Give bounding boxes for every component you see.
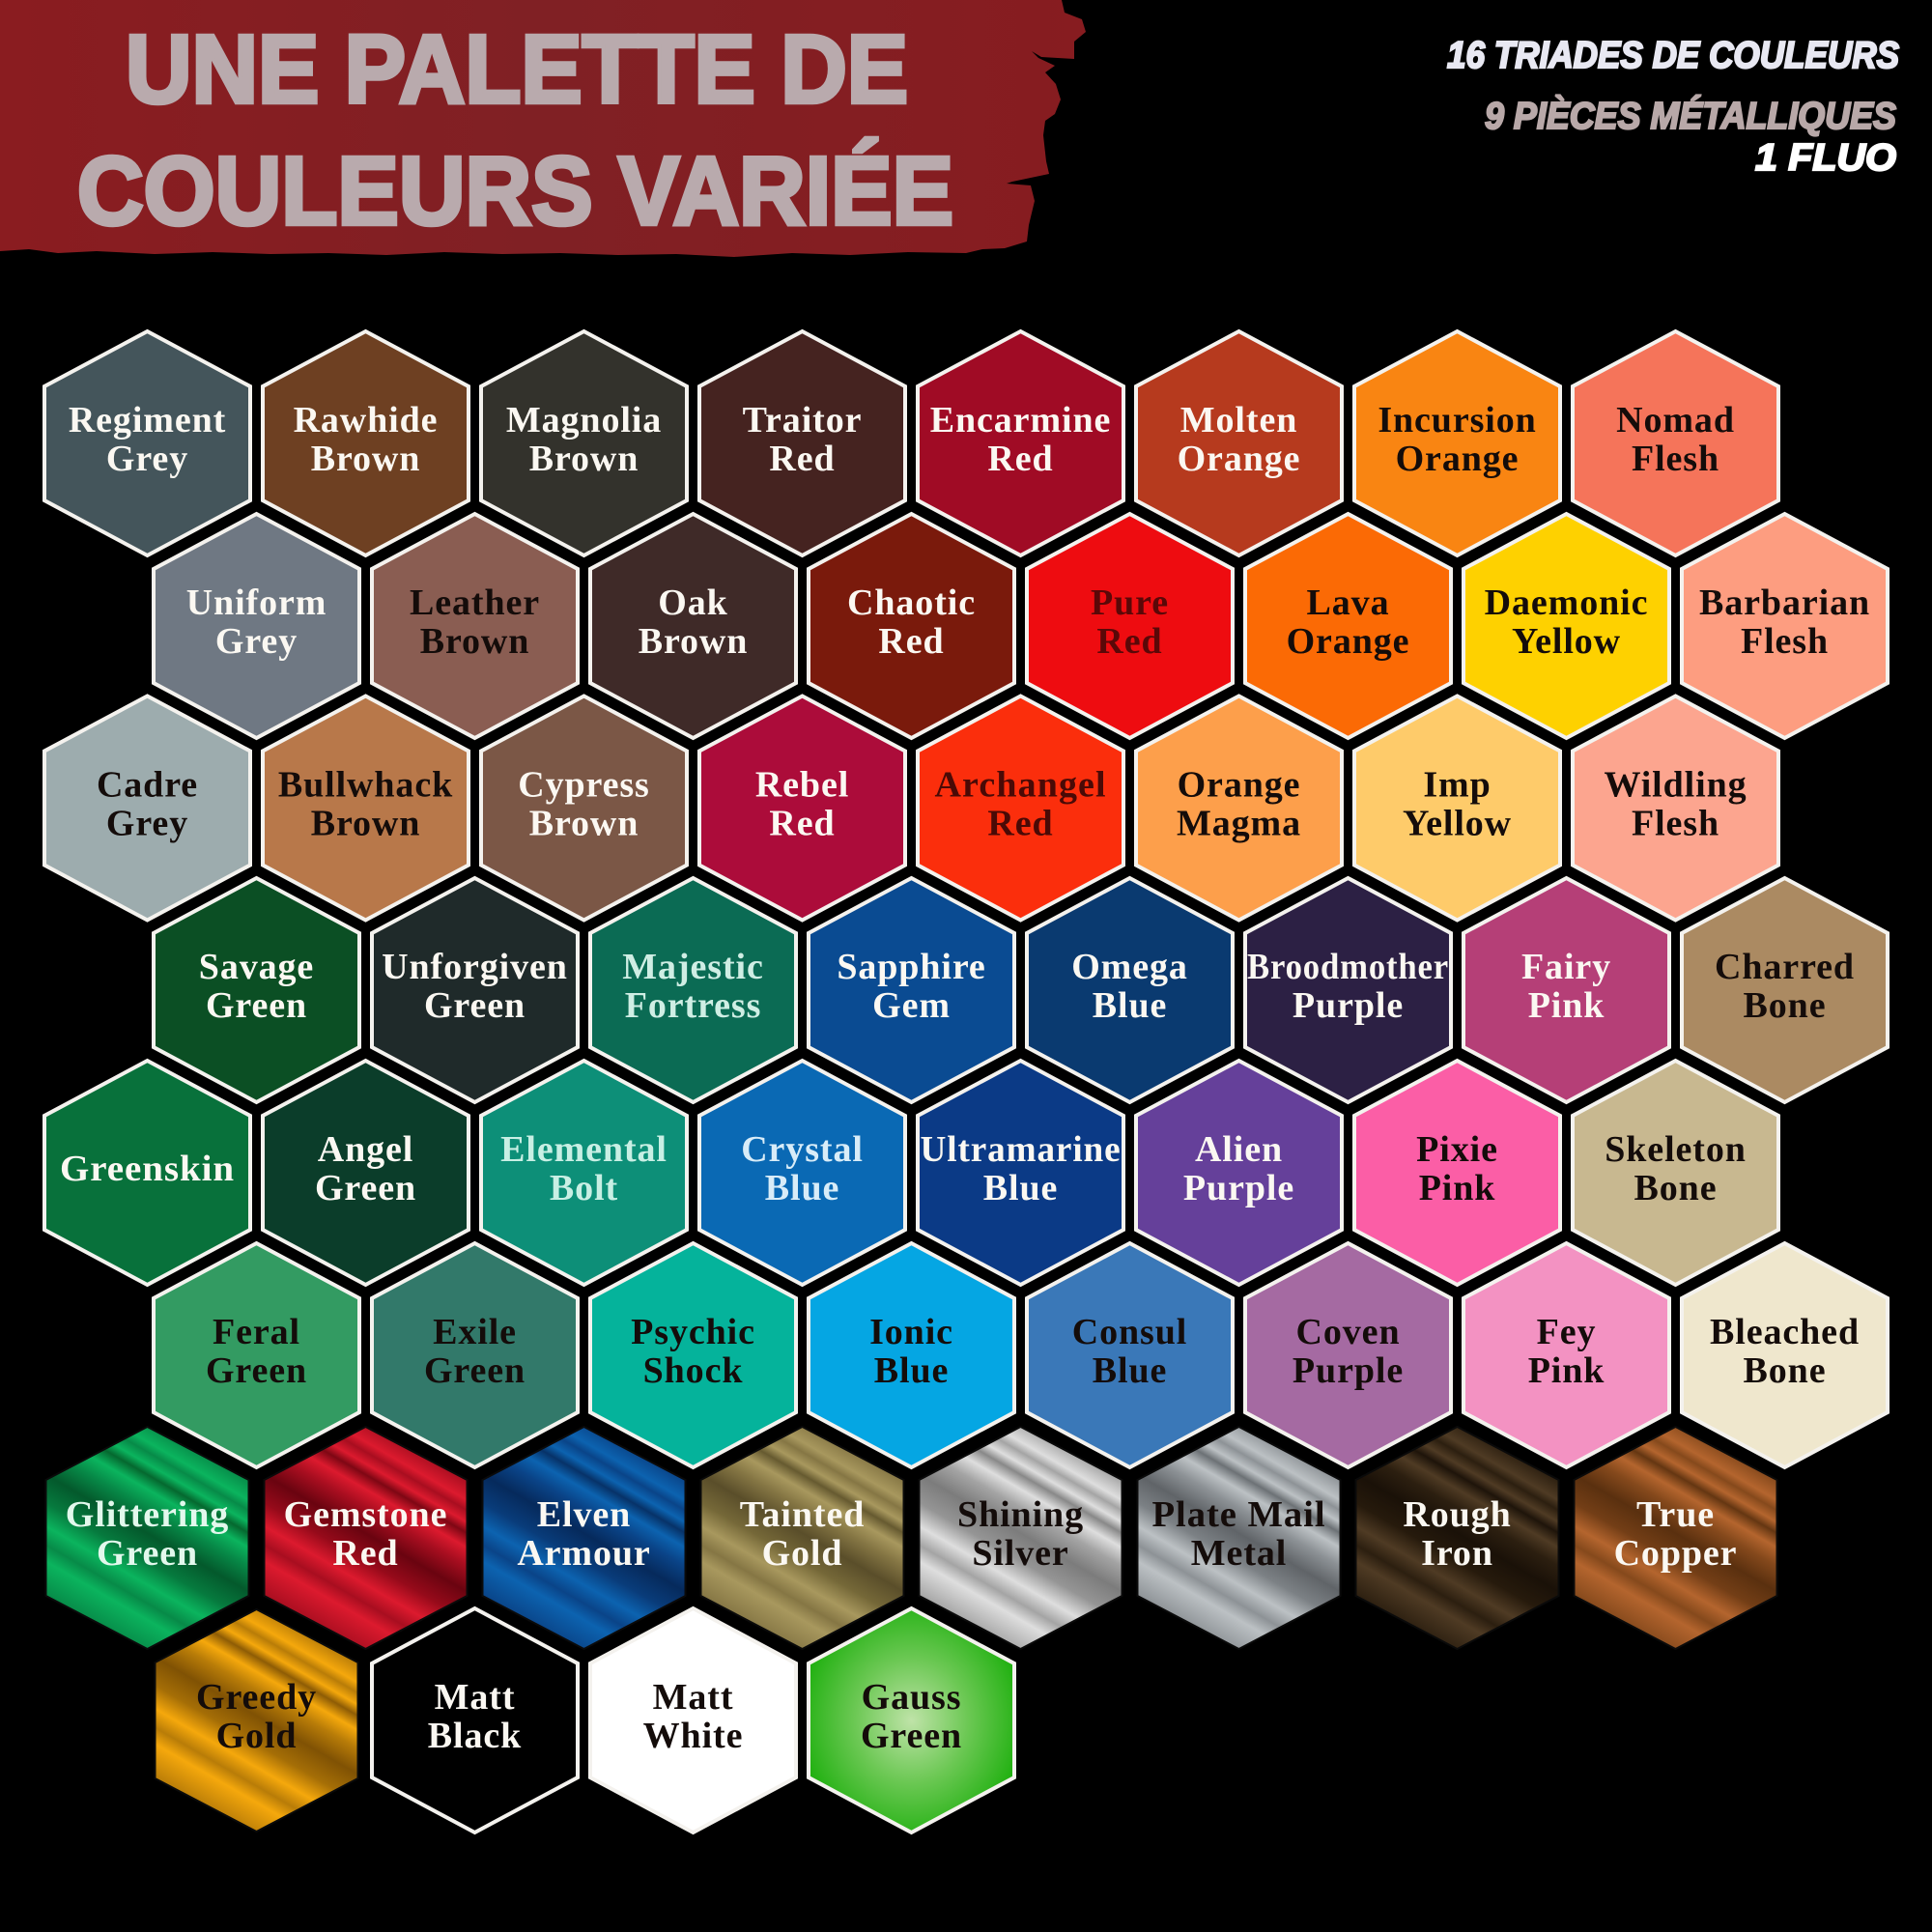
hex: Broodmother Purple	[1245, 878, 1451, 1102]
hex: Unforgiven Green: Unforgiven	[382, 947, 568, 987]
hex: Tainted Gold	[701, 1427, 904, 1649]
hex: Crystal Blue	[699, 1061, 905, 1285]
hex: Omega Blue	[1027, 878, 1233, 1102]
hex: Ionic Blue: Blue	[874, 1350, 949, 1391]
hex: Uniform Grey: Uniform	[186, 582, 327, 623]
hex: Matt Black: Black	[428, 1716, 522, 1756]
hex: Orange Magma	[1136, 696, 1342, 920]
hex: Glittering Green: Glittering	[66, 1494, 229, 1535]
hex: Feral Green: Feral	[213, 1312, 300, 1352]
hex: Matt Black: Matt	[435, 1677, 515, 1718]
hex: Pure Red: Red	[1096, 621, 1163, 662]
hex: Bullwhack Brown	[263, 696, 469, 920]
hex: Archangel Red: Archangel	[935, 765, 1107, 806]
hex: Cypress Brown: Brown	[529, 804, 639, 844]
hex: Coven Purple: Purple	[1293, 1350, 1404, 1391]
hex: Pixie Pink	[1354, 1061, 1560, 1285]
hex: Incursion Orange	[1354, 331, 1560, 555]
hex: Gemstone Red: Red	[332, 1533, 399, 1574]
hex: Coven Purple	[1245, 1243, 1451, 1467]
hex: Glittering Green	[46, 1427, 249, 1649]
hex: Archangel Red	[918, 696, 1123, 920]
hex: Consul Blue: Consul	[1072, 1312, 1187, 1352]
hex: Ionic Blue: Ionic	[869, 1312, 953, 1352]
hex: Angel Green	[263, 1061, 469, 1285]
hex: Rough Iron: Iron	[1421, 1533, 1493, 1574]
hex: Greedy Gold: Greedy	[196, 1677, 317, 1718]
hex: Ultramarine Blue	[918, 1061, 1123, 1285]
hex: Elven Armour	[483, 1427, 686, 1649]
hex: Plate Mail Metal: Plate Mail	[1151, 1494, 1325, 1535]
hex: Broodmother Purple: Purple	[1293, 985, 1404, 1026]
hex: Incursion Orange: Incursion	[1378, 400, 1537, 440]
hex: Charred Bone: Charred	[1715, 947, 1855, 987]
hex: Barbarian Flesh: Flesh	[1741, 621, 1829, 662]
hex: Gauss Green	[809, 1608, 1014, 1833]
hex: Matt Black	[372, 1608, 578, 1833]
hex: Rawhide Brown	[263, 331, 469, 555]
hex: Alien Purple	[1136, 1061, 1342, 1285]
hex: Leather Brown	[372, 514, 578, 738]
hex: Daemonic Yellow: Daemonic	[1485, 582, 1648, 623]
hex: Nomad Flesh	[1573, 331, 1778, 555]
title	[77, 15, 953, 245]
hex: Psychic Shock: Shock	[643, 1350, 743, 1391]
hex: Consul Blue: Blue	[1093, 1350, 1167, 1391]
hex: Feral Green: Green	[206, 1350, 307, 1391]
stats text block: 1 FLUO	[1755, 137, 1896, 179]
hex: Chaotic Red	[809, 514, 1014, 738]
hex: Greedy Gold	[155, 1609, 357, 1832]
hex: Cypress Brown	[481, 696, 687, 920]
hex: Savage Green: Green	[206, 985, 307, 1026]
hex: Crystal Blue: Crystal	[741, 1129, 864, 1170]
hex: Feral Green	[154, 1243, 359, 1467]
hex: Psychic Shock: Psychic	[631, 1312, 755, 1352]
hex: Gemstone Red: Gemstone	[284, 1494, 447, 1535]
hex: Majestic Fortress	[590, 878, 796, 1102]
hex: Angel Green: Angel	[318, 1129, 413, 1170]
hex: Charred Bone: Bone	[1744, 985, 1826, 1026]
hex: Pixie Pink: Pink	[1419, 1168, 1495, 1208]
hex: Savage Green	[154, 878, 359, 1102]
hex: Encarmine Red	[918, 331, 1123, 555]
hex: Oak Brown: Brown	[639, 621, 748, 662]
hex: Sapphire Gem	[809, 878, 1014, 1102]
hex: Bullwhack Brown: Bullwhack	[278, 765, 453, 806]
hex: Barbarian Flesh: Barbarian	[1699, 582, 1870, 623]
hex: Cadre Grey	[44, 696, 250, 920]
hex: Elven Armour: Elven	[537, 1494, 631, 1535]
hex: Incursion Orange: Orange	[1396, 439, 1519, 479]
hex: Lava Orange	[1245, 514, 1451, 738]
hex: Fairy Pink: Fairy	[1521, 947, 1611, 987]
hex: Molten Orange	[1136, 331, 1342, 555]
hex: Leather Brown: Leather	[410, 582, 540, 623]
hex: Rebel Red: Red	[769, 804, 836, 844]
hex: Rebel Red: Rebel	[755, 765, 849, 806]
hex: Tainted Gold: Tainted	[740, 1494, 865, 1535]
hex: Broodmother Purple: Broodmother	[1247, 947, 1449, 987]
hex: Ultramarine Blue: Blue	[983, 1168, 1058, 1208]
hex: Barbarian Flesh	[1682, 514, 1888, 738]
hex: Rawhide Brown: Rawhide	[294, 400, 438, 440]
hex: Skeleton Bone: Skeleton	[1605, 1129, 1747, 1170]
hex: Consul Blue	[1027, 1243, 1233, 1467]
hex: True Copper	[1575, 1427, 1777, 1649]
hex: Imp Yellow	[1354, 696, 1560, 920]
hex: Wildling Flesh: Wildling	[1604, 765, 1747, 806]
hex: Greedy Gold: Gold	[216, 1716, 297, 1756]
hex: Molten Orange: Molten	[1180, 400, 1297, 440]
hex: Exile Green: Exile	[433, 1312, 517, 1352]
stats text block: 9 PIÈCES MÉTALLIQUES	[1485, 95, 1896, 137]
hex: Exile Green: Green	[424, 1350, 526, 1391]
hex: Majestic Fortress: Fortress	[625, 985, 761, 1026]
hex: Traitor Red: Traitor	[743, 400, 862, 440]
hex: Matt White: White	[643, 1716, 743, 1756]
hex: Omega Blue: Blue	[1093, 985, 1167, 1026]
hex: Oak Brown	[590, 514, 796, 738]
hex: Bleached Bone: Bleached	[1710, 1312, 1860, 1352]
hex: Regiment Grey: Grey	[106, 439, 188, 479]
hex: Coven Purple: Coven	[1296, 1312, 1400, 1352]
hex: Sapphire Gem: Sapphire	[837, 947, 986, 987]
hex: Wildling Flesh: Flesh	[1632, 804, 1719, 844]
hex: Sapphire Gem: Gem	[872, 985, 951, 1026]
hex: Daemonic Yellow: Yellow	[1512, 621, 1621, 662]
hex: Majestic Fortress: Majestic	[622, 947, 764, 987]
hex: Chaotic Red: Chaotic	[847, 582, 976, 623]
banner: torn red paint strip	[0, 0, 1086, 257]
hex: Alien Purple: Purple	[1183, 1168, 1294, 1208]
title: COULEURS VARIÉE	[77, 137, 953, 245]
hex: Chaotic Red: Red	[878, 621, 945, 662]
hex: Nomad Flesh: Nomad	[1616, 400, 1735, 440]
hex: Fey Pink	[1463, 1243, 1669, 1467]
title: UNE PALETTE DE	[126, 15, 908, 124]
hex: Archangel Red: Red	[987, 804, 1054, 844]
hex: Magnolia Brown	[481, 331, 687, 555]
hex: Uniform Grey: Grey	[215, 621, 298, 662]
hex: Elemental Bolt: Bolt	[550, 1168, 618, 1208]
hex: Ionic Blue	[809, 1243, 1014, 1467]
hex: Shining Silver	[920, 1427, 1122, 1649]
hex: Lava Orange: Orange	[1287, 621, 1409, 662]
hex: Daemonic Yellow	[1463, 514, 1669, 738]
hex: Tainted Gold: Gold	[762, 1533, 842, 1574]
hex: Wildling Flesh	[1573, 696, 1778, 920]
hexagon colour grid	[44, 331, 1888, 1833]
hex: Encarmine Red: Red	[987, 439, 1054, 479]
hex: Rebel Red	[699, 696, 905, 920]
hex: Crystal Blue: Blue	[765, 1168, 839, 1208]
hex: Imp Yellow: Yellow	[1403, 804, 1512, 844]
hex: Bleached Bone	[1682, 1243, 1888, 1467]
hex: Leather Brown: Brown	[420, 621, 529, 662]
hex: Regiment Grey	[44, 331, 250, 555]
hex: Angel Green: Green	[315, 1168, 416, 1208]
hex: Shining Silver: Silver	[972, 1533, 1069, 1574]
hex: Rawhide Brown: Brown	[311, 439, 420, 479]
hex: Elemental Bolt: Elemental	[500, 1129, 668, 1170]
hex: Lava Orange: Lava	[1307, 582, 1389, 623]
stats text block	[1447, 35, 1899, 179]
hex: Encarmine Red: Encarmine	[930, 400, 1111, 440]
hex: Skeleton Bone	[1573, 1061, 1778, 1285]
hex: Regiment Grey: Regiment	[69, 400, 226, 440]
hex: Uniform Grey	[154, 514, 359, 738]
hex: Ultramarine Blue: Ultramarine	[920, 1129, 1121, 1170]
hex: Greenskin	[44, 1061, 250, 1285]
hex: Elven Armour: Armour	[517, 1533, 651, 1574]
hex: Pixie Pink: Pixie	[1416, 1129, 1498, 1170]
hex: Elemental Bolt	[481, 1061, 687, 1285]
hex: Omega Blue: Omega	[1071, 947, 1188, 987]
hex: Orange Magma: Orange	[1178, 765, 1300, 806]
hex: Cypress Brown: Cypress	[518, 765, 650, 806]
hex: Skeleton Bone: Bone	[1634, 1168, 1717, 1208]
hex: Matt White: Matt	[653, 1677, 733, 1718]
hex: Oak Brown: Oak	[658, 582, 728, 623]
hex: Pure Red	[1027, 514, 1233, 738]
hex: Bleached Bone: Bone	[1744, 1350, 1826, 1391]
hex: Gemstone Red	[265, 1427, 468, 1649]
hex: Molten Orange: Orange	[1178, 439, 1300, 479]
hex: Plate Mail Metal: Metal	[1191, 1533, 1287, 1574]
hex: Magnolia Brown: Magnolia	[506, 400, 662, 440]
hex: True Copper: Copper	[1614, 1533, 1737, 1574]
hex: Matt White	[590, 1608, 796, 1833]
hex: Psychic Shock	[590, 1243, 796, 1467]
hex: Rough Iron: Rough	[1403, 1494, 1512, 1535]
hex: Savage Green: Savage	[199, 947, 314, 987]
hex: Gauss Green: Green	[861, 1716, 962, 1756]
hex: Glittering Green: Green	[97, 1533, 198, 1574]
hex: Fey Pink: Fey	[1537, 1312, 1596, 1352]
hex: Shining Silver: Shining	[957, 1494, 1084, 1535]
hex: Magnolia Brown: Brown	[529, 439, 639, 479]
hex: Alien Purple: Alien	[1195, 1129, 1283, 1170]
hex: Cadre Grey: Cadre	[97, 765, 198, 806]
hex: Nomad Flesh: Flesh	[1632, 439, 1719, 479]
hex: Rough Iron	[1356, 1427, 1559, 1649]
hex: Traitor Red	[699, 331, 905, 555]
hex: Plate Mail Metal	[1138, 1427, 1341, 1649]
hex: Fairy Pink: Pink	[1528, 985, 1605, 1026]
hex: Pure Red: Pure	[1091, 582, 1169, 623]
hex: Charred Bone	[1682, 878, 1888, 1102]
hex: Traitor Red: Red	[769, 439, 836, 479]
hex: Imp Yellow: Imp	[1423, 765, 1492, 806]
hex: Exile Green	[372, 1243, 578, 1467]
hex: Gauss Green: Gauss	[862, 1677, 961, 1718]
hex: Unforgiven Green	[372, 878, 578, 1102]
hex: Greenskin: Greenskin	[60, 1149, 235, 1189]
hex: Fairy Pink	[1463, 878, 1669, 1102]
hex: Bullwhack Brown: Brown	[311, 804, 420, 844]
hex: Unforgiven Green: Green	[424, 985, 526, 1026]
hex: True Copper: True	[1636, 1494, 1715, 1535]
hex: Cadre Grey: Grey	[106, 804, 188, 844]
hex: Fey Pink: Pink	[1528, 1350, 1605, 1391]
hex: Orange Magma: Magma	[1177, 804, 1301, 844]
